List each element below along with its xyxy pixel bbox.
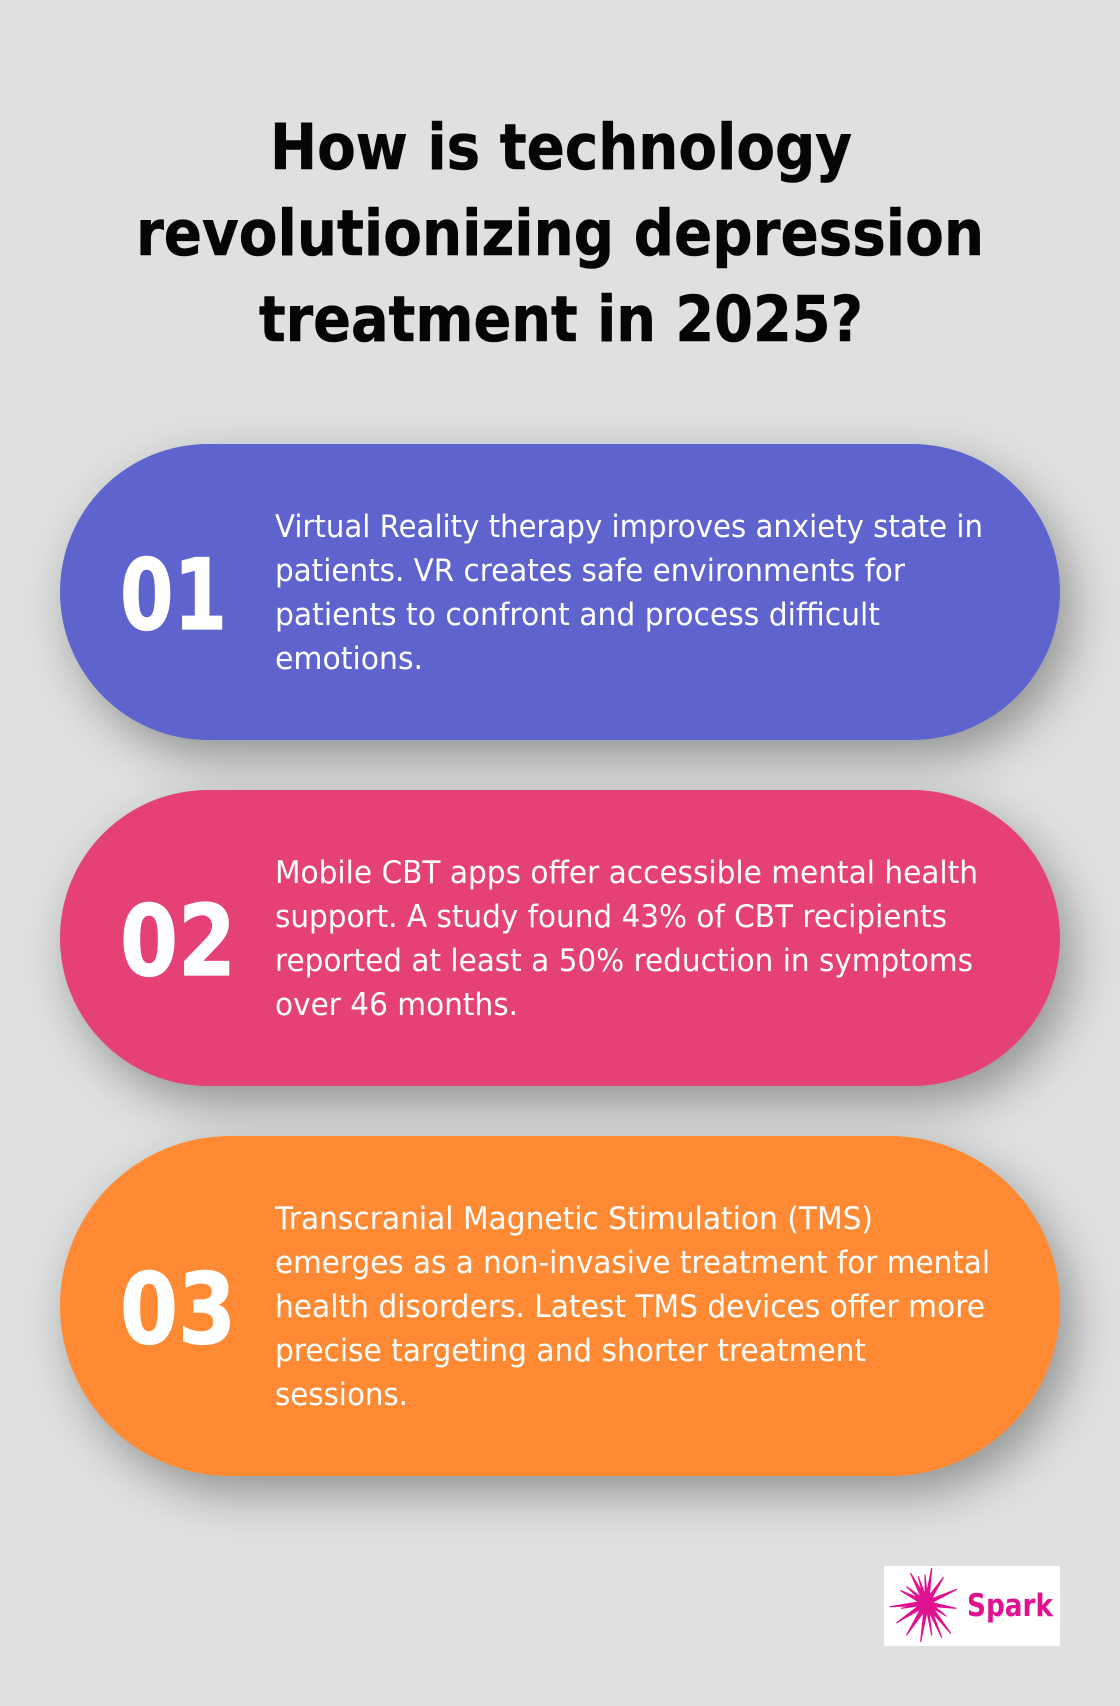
- title: [136, 111, 984, 356]
- text: step 02 description: [275, 855, 978, 1023]
- text: step 01 description: [275, 509, 983, 677]
- text: step 02 description: over 46 months.: [275, 987, 518, 1023]
- title: treatment in 2025?: [259, 283, 863, 356]
- text: step 03 description: health disorders. Latest TMS devices offer more: [275, 1289, 985, 1325]
- title: How is technology: [270, 111, 852, 184]
- panel: step 01 virtual reality therapy: [60, 444, 1060, 740]
- number 01: 01: [120, 539, 227, 653]
- number 03: 03: [120, 1253, 236, 1367]
- text: step 03 description: [274, 1201, 990, 1413]
- panel: step 03 transcranial magnetic stimulation: [60, 1136, 1060, 1476]
- text: step 02 description: Mobile CBT apps offer accessible mental health: [275, 855, 978, 891]
- number 02: 02: [120, 885, 236, 999]
- logo: Spark: [884, 1566, 1060, 1646]
- panel: step 02 mobile CBT apps: [60, 790, 1060, 1086]
- text: step 03 description: precise targeting and shorter treatment: [275, 1333, 866, 1369]
- text: step 02 description: reported at least a 50% reduction in symptoms: [275, 943, 973, 979]
- text: step 01 description: emotions.: [275, 641, 423, 677]
- text: step 03 description: sessions.: [275, 1377, 408, 1413]
- title: revolutionizing depression: [136, 197, 984, 270]
- icon: spark starburst: [890, 1568, 957, 1642]
- text: step 02 description: support. A study found 43% of CBT recipients: [275, 899, 947, 935]
- text: step 01 description: Virtual Reality therapy improves anxiety state in: [275, 509, 983, 545]
- text: step 01 description: patients to confront and process difficult: [275, 597, 880, 633]
- text: step 03 description: emerges as a non-invasive treatment for mental: [275, 1245, 990, 1281]
- text: step 03 description: Transcranial Magnetic Stimulation (TMS): [274, 1201, 873, 1237]
- text: step 01 description: patients. VR creates safe environments for: [275, 553, 905, 589]
